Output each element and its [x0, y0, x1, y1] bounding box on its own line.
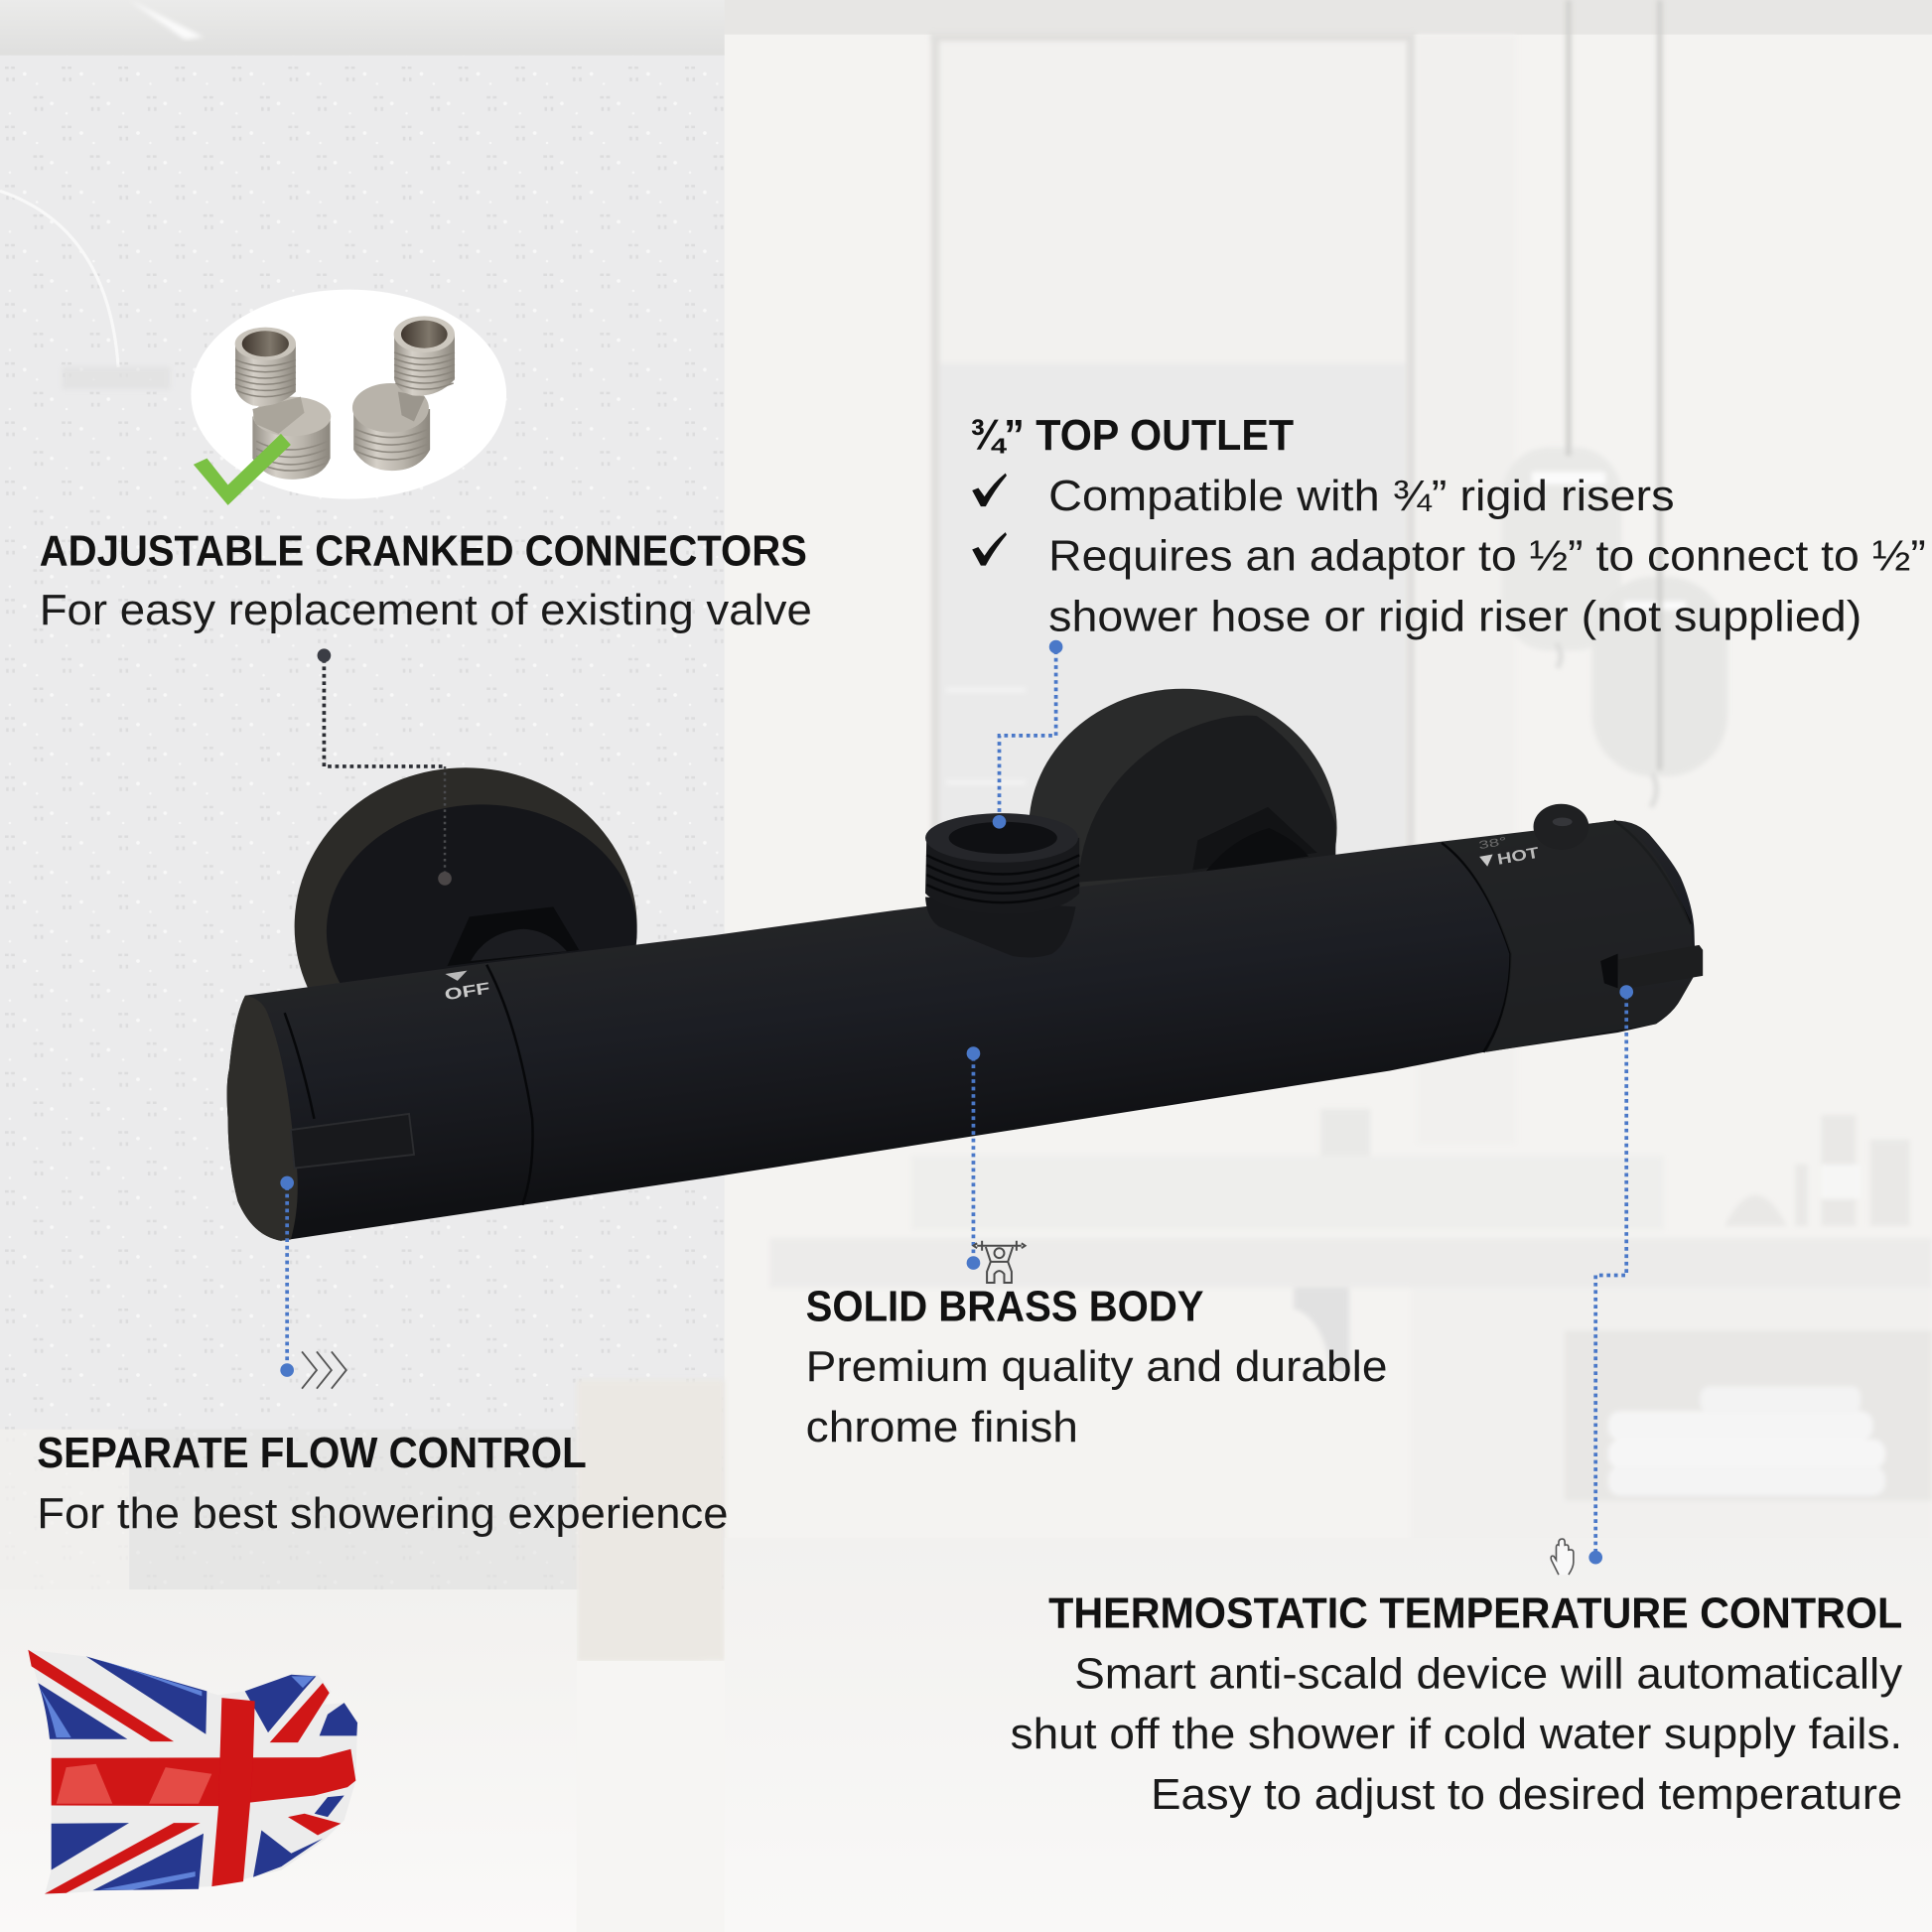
right lever — [1600, 945, 1703, 990]
text block: thermostatic temperature control: Smart anti-scald device will automatically — [1074, 1650, 1903, 1698]
top outlet — [925, 813, 1079, 957]
right cap tone — [1445, 821, 1696, 1052]
text block: top outlet: Compatible with ¾” rigid risers — [1048, 473, 1675, 520]
temperature knob — [1534, 804, 1588, 850]
icon: flow chevrons — [302, 1351, 346, 1389]
callout line: temperature control — [1588, 985, 1633, 1565]
inset: adjustable connectors photo — [191, 290, 506, 505]
marking: HOT: 38° — [1477, 835, 1508, 852]
shower valve product — [227, 689, 1703, 1241]
marking: OFF — [442, 967, 491, 1004]
text block: separate flow control — [37, 1430, 728, 1538]
callout line: solid brass body — [967, 1046, 980, 1270]
seams — [285, 821, 1691, 1205]
text block: top outlet: Requires an adaptor to ½” to connect to ½” — [1048, 533, 1926, 581]
icon: green check — [194, 434, 291, 505]
valve body — [227, 821, 1696, 1241]
callout line: connectors — [318, 648, 452, 886]
left wall plate — [295, 767, 637, 1085]
right connector — [352, 316, 455, 471]
left lever — [291, 1114, 414, 1169]
text block: solid brass body: chrome finish — [806, 1404, 1078, 1451]
right wall plate — [1029, 689, 1337, 967]
icon: check mark — [972, 474, 1007, 506]
icon: hand — [1551, 1539, 1574, 1575]
icon: check mark — [972, 532, 1007, 566]
marking: HOT: HOT — [1496, 845, 1541, 869]
marking: OFF: OFF — [444, 979, 491, 1004]
text block: solid brass body — [806, 1283, 1387, 1451]
text block: separate flow control: SEPARATE FLOW CONTROL — [37, 1430, 587, 1477]
text block: top outlet: ¾” TOP OUTLET — [970, 412, 1295, 460]
text block: separate flow control: For the best showering experience — [37, 1490, 728, 1538]
text block: thermostatic temperature control: THERMOSTATIC TEMPERATURE CONTROL — [1048, 1589, 1902, 1637]
marking: HOT — [1476, 830, 1541, 872]
text block: adjustable cranked connectors: ADJUSTABLE CRANKED CONNECTORS — [40, 528, 807, 576]
text block: thermostatic temperature control — [1011, 1589, 1903, 1819]
text block: thermostatic temperature control: shut off the shower if cold water supply fails. — [1011, 1711, 1902, 1758]
text block: thermostatic temperature control: Easy to adjust to desired temperature — [1151, 1771, 1902, 1819]
left end face — [227, 996, 298, 1241]
text block: top outlet: shower hose or rigid riser (not supplied) — [1048, 593, 1862, 640]
callout line: top outlet — [993, 640, 1062, 829]
callout line: flow control — [280, 1176, 294, 1377]
text block: adjustable cranked connectors — [40, 528, 812, 634]
text block: top outlet — [970, 412, 1926, 640]
icon: waving union flag — [28, 1650, 357, 1894]
left connector — [235, 328, 331, 480]
text block: solid brass body: Premium quality and durable — [806, 1343, 1387, 1391]
icon: weightlifter — [973, 1241, 1026, 1283]
text block: adjustable cranked connectors: For easy replacement of existing valve — [40, 587, 812, 634]
text block: solid brass body: SOLID BRASS BODY — [806, 1283, 1204, 1330]
